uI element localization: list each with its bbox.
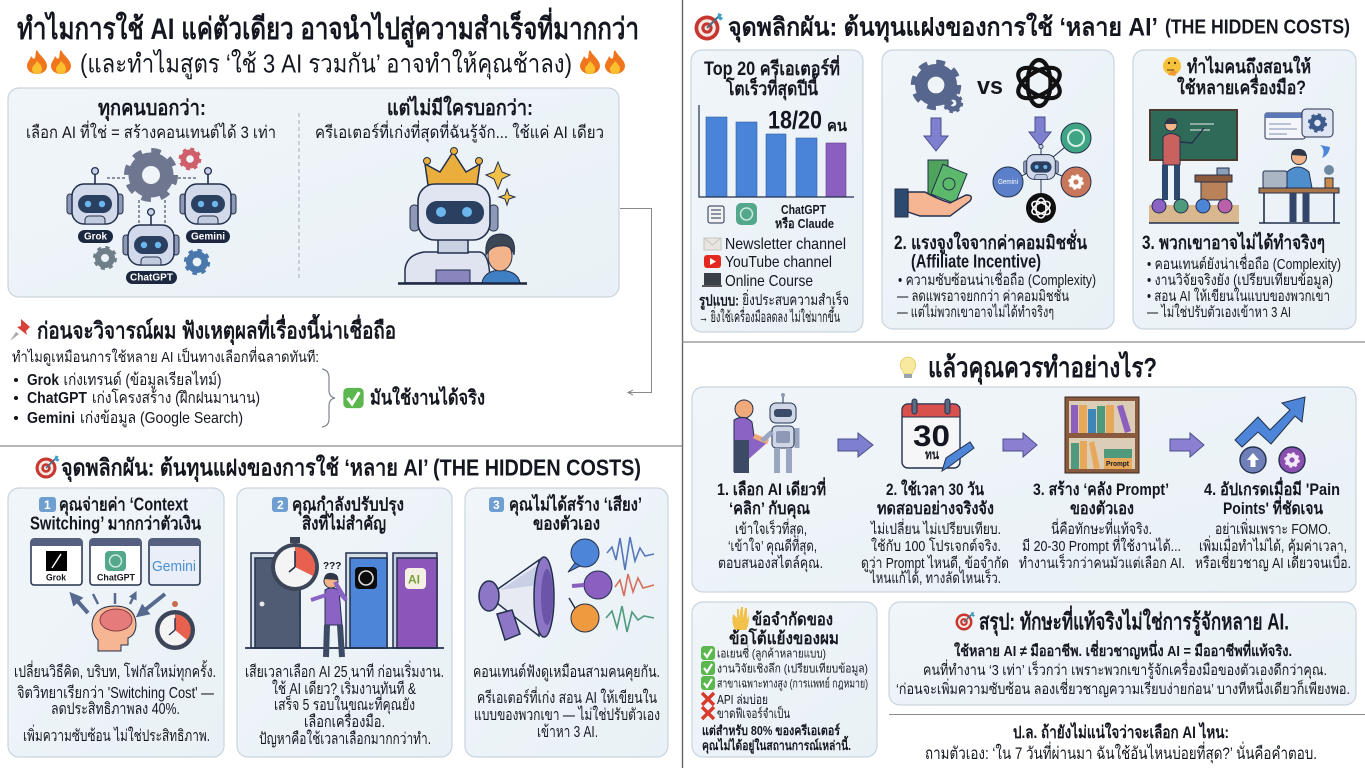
panel: disclaimer limits <box>692 602 877 757</box>
icon: thinking face <box>1163 57 1181 76</box>
step 2 text: ใช้กับ 100 โปรเจกต์จริง. <box>871 537 1001 555</box>
text: 80 percent note: คุณไม่ได้อยู่ในสถานการณ์เหล่านี้. <box>702 735 851 754</box>
heading: top 20: Top 20 ครีเอเตอร์ที่ <box>704 55 840 80</box>
step 4 text <box>1195 477 1351 572</box>
text: postscript: ป.ล. ถ้ายังไม่แน่ใจว่าจะเลือก AI ไหน: <box>1013 722 1229 742</box>
section: why it sounds credible <box>10 314 485 428</box>
text: intro: ทำไมดูเหมือนการใช้หลาย AI เป็นทางเลือกที่ฉลาดทันที: <box>12 346 319 366</box>
list: checks: งานวิจัยเชิงลึก (เปรียบเทียบข้อมูล) <box>717 662 868 677</box>
list: checks: สาขาเฉพาะทางสูง (การแพทย์ กฎหมาย) <box>717 677 868 692</box>
icon: three AI robots with gears: Grok <box>84 232 107 243</box>
text: best creators one AI: ครีเอเตอร์ที่เก่งที่สุดที่ฉันรู้จัก... ใช้แค่ AI เดียว <box>315 120 604 143</box>
icon: pin <box>10 319 30 341</box>
icon: person shaking hands with robot <box>734 393 797 473</box>
callout: it works: มันใช้งานได้จริง <box>370 386 485 410</box>
list: channels: YouTube channel <box>725 254 832 271</box>
heading: improving unimportant: คุณกำลังปรับปรุง <box>292 495 404 517</box>
text: same voice body: แบบของพวกเขา — ไม่ใช่ปรับตัวเอง <box>474 705 660 724</box>
icon: prompt bookshelf: Prompt <box>1106 461 1130 468</box>
icon: doors, stopwatch and confused person <box>245 537 444 657</box>
step 4 text: อย่าเพิ่มเพราะ FOMO. <box>1215 518 1331 538</box>
icon: hand with money <box>895 160 971 217</box>
text: time wasted body: เสียเวลาเลือก AI 25 นาที ก่อนเริ่มงาน. <box>245 660 444 681</box>
heading: top 20 <box>704 55 840 101</box>
heading: improving unimportant <box>272 495 404 535</box>
list: crosses: ขาดฟีเจอร์จำเป็น <box>717 704 790 721</box>
heading: everyone says: ทุกคนบอกว่า: <box>98 97 206 122</box>
heading: top 20: โตเร็วที่สุดปีนี้ <box>725 74 819 101</box>
arrow: down to tools <box>1029 117 1051 146</box>
icon: creator at desk <box>1259 109 1340 223</box>
icon: three windows, brain and clock: Gemini <box>152 558 196 575</box>
step 1 text: ตอบสนองสไตล์คุณ. <box>718 554 823 573</box>
step 2 text: ทดสอบอย่างจริงจัง <box>877 499 994 518</box>
icon: robot linked to many AI tools: Gemini <box>998 179 1018 186</box>
arrow: connector to credibility section <box>620 208 652 395</box>
icon: brace <box>322 369 335 427</box>
panel: optimising the wrong thing <box>237 488 452 757</box>
icon: megaphone with speech bubbles and waves <box>479 537 654 640</box>
icon: three AI robots with gears: Gemini <box>191 232 225 243</box>
step 1 text: ‘คลิก’ กับคุณ <box>729 499 810 519</box>
text: summary body <box>896 640 1350 698</box>
text: same voice body: คอนเทนต์ฟังดูเหมือนสามคนคุยกัน. <box>473 662 660 682</box>
arrow: down to money <box>924 118 948 151</box>
list: channels <box>702 236 846 290</box>
text: summary body: ใช้หลาย AI ≠ มืออาชีพ. เชี่ยวชาญหนึ่ง AI = มืออาชีพที่แท้จริง. <box>954 640 1292 660</box>
heading: context switching: คุณจ่ายค่า ‘Context <box>59 495 188 517</box>
heading: no voice <box>489 494 642 534</box>
step 2 text: ดูว่า Prompt ไหนดี, ข้อจำกัด <box>861 554 1009 572</box>
list: tools: Gemini <box>27 410 75 427</box>
list: tools: ChatGPT <box>27 390 87 407</box>
arrow: step 3 to 4 <box>1170 433 1204 457</box>
step 2 text: ไม่เปลี่ยน ไม่เปรียบเทียบ. <box>870 518 1001 538</box>
icon: calendar 30 days: ทน <box>925 447 939 462</box>
heading: context switching <box>30 495 202 534</box>
list: crosses <box>702 692 790 721</box>
list: channels: Newsletter channel <box>725 236 846 253</box>
text: switching cost body: ลดประสิทธิภาพลง 40%. <box>51 701 180 718</box>
heading: why teach: ใช้หลายเครื่องมือ? <box>1177 74 1306 99</box>
icon: three windows, brain and clock <box>31 539 200 651</box>
list: tools <box>14 370 260 428</box>
icon: three windows, brain and clock: ChatGPT <box>97 573 135 583</box>
text: switching cost body: จิตวิทยาเรียกว่า 'Switching Cost' — <box>17 684 214 702</box>
step 3 text: นี่คือทักษะที่แท้จริง. <box>1051 518 1152 538</box>
heading: limits <box>729 610 839 648</box>
heading: why teach <box>1177 55 1311 99</box>
list: tools: เก่งข้อมูล (Google Search) <box>80 409 243 428</box>
text: pattern: รูปแบบ: ยิ่งประสบความสำเร็จ <box>699 289 849 310</box>
panel: top 20 creators <box>691 50 863 332</box>
heading: what should you do <box>900 351 1157 385</box>
label: ChatGPT or Claude <box>775 202 834 231</box>
step 1 text: เข้าใจเร็วที่สุด, <box>735 518 807 539</box>
heading: no voice: คุณไม่ได้สร้าง ‘เสียง’ <box>509 494 642 517</box>
icon: three AI robots with gears: ChatGPT <box>130 273 173 284</box>
icon: crowned robot with person <box>398 148 527 284</box>
heading: affiliate incentive: 2. แรงจูงใจจากค่าคอมมิชชั่น <box>894 229 1087 255</box>
step 1 text: ‘เข้าใจ’ คุณดีที่สุด, <box>728 535 817 556</box>
step 1 text <box>717 477 826 573</box>
bar chart: 18 of 20: 18/20 <box>768 107 822 135</box>
heading: limits: ข้อโต้แย้งของผม <box>729 628 839 648</box>
title: (และทำไมสูตร ‘ใช้ 3 AI รวมกัน’ อาจทำให้คุณช้าลง) <box>80 49 572 80</box>
heading: affiliate incentive: (Affiliate Incentive) <box>911 252 1041 272</box>
heading: nobody says: แต่ไม่มีใครบอกว่า: <box>387 95 533 120</box>
icon: calendar 30 days: 30 <box>913 420 950 453</box>
heading: credibility: ก่อนจะวิจารณ์ผม ฟังเหตุผลที่เรื่องนี้น่าเชื่อถือ <box>37 314 396 346</box>
icon: three windows, brain and clock: Grok <box>46 573 67 583</box>
text: same voice body: เข้าหา 3 AI. <box>537 723 598 741</box>
text: affiliate bullets: — แต่ไม่พวกเขาอาจไม่ได้ทำจริงๆ <box>897 303 1054 321</box>
icon: raised hand <box>732 607 749 630</box>
heading: context switching: 1 <box>44 498 51 512</box>
icon: doors, stopwatch and confused person: AI <box>408 573 420 587</box>
text: same voice body <box>473 662 660 741</box>
title <box>17 7 639 80</box>
text: affiliate bullets <box>897 269 1096 321</box>
bar chart: 18 of 20: คน <box>827 118 847 135</box>
heading: improving unimportant: 2 <box>277 498 284 512</box>
step 3 text: 3. สร้าง ‘คลัง Prompt’ <box>1033 480 1169 499</box>
callout: it works <box>343 386 485 410</box>
step 2 text: 2. ใช้เวลา 30 วัน <box>886 479 984 499</box>
heading: no voice: 3 <box>493 498 500 512</box>
icon: gears versus knot logo: vs <box>977 73 1003 100</box>
arrow: step 2 to 3 <box>1003 433 1037 457</box>
heading: limits: ข้อจำกัดของ <box>752 610 833 629</box>
title: ทำไมการใช้ AI แค่ตัวเดียว อาจนำไปสู่ความสำเร็จที่มากกว่า <box>17 7 639 48</box>
text: postscript <box>925 722 1317 764</box>
step 3 text <box>1019 480 1185 572</box>
list: crosses: API ล่มบ่อย <box>717 692 768 707</box>
text: 80 percent note: แต่สำหรับ 80% ของครีเอเตอร์ <box>702 723 840 738</box>
text: do-it bullets <box>1147 253 1341 321</box>
step 4 text: Points' ที่ชัดเจน <box>1223 496 1323 518</box>
heading: hidden costs (right): จุดพลิกผัน: ต้นทุนแฝงของการใช้ ‘หลาย AI’ <box>728 12 1158 44</box>
icon: three AI robots with gears <box>67 149 236 284</box>
panel: everyone says vs nobody says <box>8 88 619 297</box>
heading: hidden costs (right) <box>694 12 1350 44</box>
list: tools: เก่งเทรนด์ (ข้อมูลเรียลไทม์) <box>64 370 222 390</box>
list: checks <box>701 645 868 692</box>
icon: calendar 30 days <box>902 399 974 471</box>
label: ChatGPT or Claude: หรือ Claude <box>775 216 834 231</box>
step 1 text: 1. เลือก AI เดียวที่ <box>717 477 826 499</box>
text: time wasted body: ปัญหาคือใช้เวลาเลือกมากกว่าทำ. <box>259 729 431 748</box>
icon: gears versus knot logo <box>914 60 1065 112</box>
text: time wasted body: ใช้ AI เดียว? เริ่มงานทันที & <box>272 677 416 698</box>
text: time wasted body <box>245 660 444 748</box>
panel: summary <box>889 602 1356 705</box>
icon: robot linked to many AI tools <box>993 123 1091 223</box>
heading: hidden costs (left): จุดพลิกผัน: ต้นทุนแฝงของการใช้ ‘หลาย AI’ (THE HIDDEN COSTS) <box>61 454 641 483</box>
text: do-it bullets: — ไม่ใช่ปรับตัวเองเข้าหา 3 AI <box>1147 303 1291 321</box>
step 4 text: 4. อัปเกรดเมื่อมี 'Pain <box>1204 477 1340 499</box>
heading: affiliate incentive <box>894 229 1087 272</box>
step 2 text: ไหนแก้ได้, ทางลัดไหนเร็ว. <box>869 568 1001 587</box>
text: switching cost body <box>14 660 216 745</box>
text: time wasted body: เสร็จ 5 รอบในขณะที่คุณยัง <box>274 693 415 715</box>
text: pattern: → ยิ่งใช้เครื่องมือลดลง ไม่ใช่มากขึ้น <box>699 306 840 326</box>
list: checks: เอเยนซี่ (ลูกค้าหลายแบบ) <box>717 645 826 662</box>
panel: no own voice <box>465 488 668 757</box>
list: channels: Online Course <box>725 273 813 290</box>
list: tools: เก่งโครงสร้าง (ฝึกฝนมานาน) <box>92 388 260 407</box>
step 3 text: มี 20-30 Prompt ที่ใช้งานได้... <box>1022 535 1181 555</box>
heading: may not do it themselves: 3. พวกเขาอาจไม่ได้ทำจริงๆ <box>1142 231 1325 254</box>
heading: improving unimportant: สิ่งที่ไม่สำคัญ <box>302 511 386 535</box>
icon: growth arrow with upgrade badges <box>1235 397 1305 473</box>
icon: doors, stopwatch and confused person: ??? <box>323 561 341 572</box>
text: switching cost body: เปลี่ยนวิธีคิด, บริบท, โฟกัสใหม่ทุกครั้ง. <box>14 660 216 682</box>
step 3 text: ของตัวเอง <box>1070 499 1134 518</box>
heading: summary <box>956 605 1289 637</box>
step 3 text: ทำงานเร็วกว่าคนมัวแต่เลือก AI. <box>1019 553 1185 572</box>
arrow: step 1 to 2 <box>838 433 873 457</box>
text: pattern <box>699 289 849 326</box>
icon: teacher and classroom <box>1149 110 1239 223</box>
bar chart: 18 of 20 <box>699 105 854 197</box>
icons: document and chat logo <box>708 203 757 225</box>
panel: why teach many tools <box>1133 50 1356 329</box>
heading: why teach: ทำไมคนถึงสอนให้ <box>1187 55 1311 78</box>
panel: affiliate incentive <box>882 50 1114 329</box>
text: affiliate bullets: — ลดแพรอาจยกกว่า ค่าคอมมิชชั่น <box>897 285 1069 305</box>
step 2 text <box>861 479 1009 587</box>
heading: what should you do: แล้วคุณควรทำอย่างไร? <box>928 351 1157 385</box>
text: right AI 3x: เลือก AI ที่ใช่ = สร้างคอนเทนต์ได้ 3 เท่า <box>26 120 276 142</box>
text: affiliate bullets: • ความซับซ้อนน่าเชื่อถือ (Complexity) <box>898 269 1096 289</box>
text: same voice body: ครีเอเตอร์ที่เก่ง สอน AI ให้เขียนใน <box>477 686 657 707</box>
text: time wasted body: เลือกเครื่องมือ. <box>304 710 385 731</box>
panel: four steps <box>692 387 1356 592</box>
text: switching cost body: เพิ่มความซับซ้อน ไม่ใช่ประสิทธิภาพ. <box>23 724 210 745</box>
icon: prompt bookshelf <box>1065 397 1139 473</box>
panel: context switching <box>8 488 224 757</box>
list: tools: Grok <box>27 372 59 389</box>
text: 80 percent note <box>702 723 851 754</box>
heading: context switching: Switching’ มากกว่าตัวเงิน <box>30 514 202 534</box>
heading: no voice: ของตัวเอง <box>533 514 600 534</box>
label: ChatGPT or Claude: ChatGPT <box>781 202 826 217</box>
